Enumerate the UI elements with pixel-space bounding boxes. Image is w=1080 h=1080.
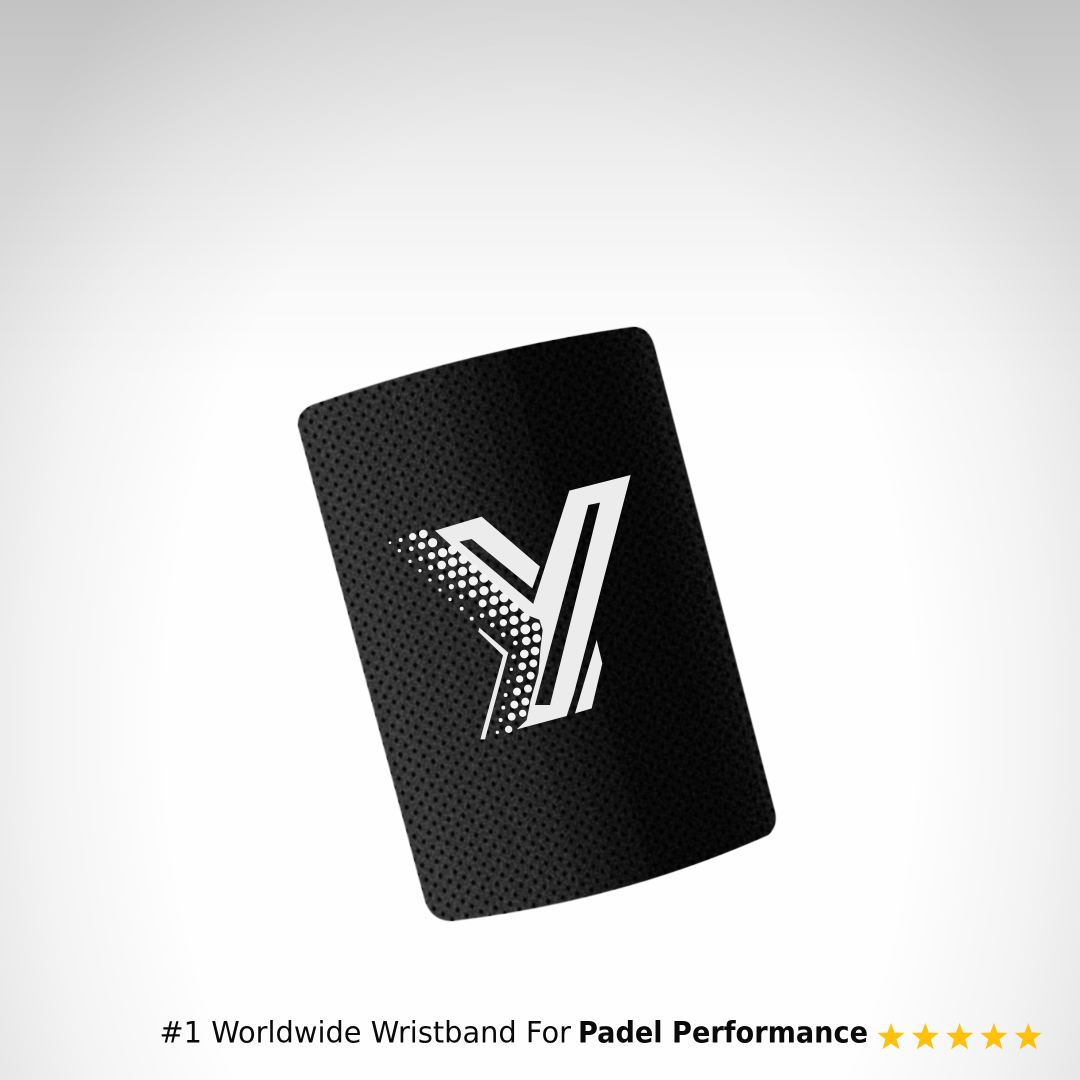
star 5 — [1015, 1023, 1042, 1049]
star 3 — [946, 1023, 973, 1049]
logo small right piece — [575, 640, 602, 713]
star 2 — [912, 1023, 939, 1049]
logo upper arm — [435, 517, 540, 620]
logo: Y mark — [389, 475, 631, 739]
five star rating — [878, 1023, 1042, 1049]
logo main stroke — [517, 475, 631, 729]
wristband product — [297, 326, 776, 922]
tagline — [160, 1016, 868, 1050]
tagline: #1 Worldwide Wristband For — [160, 1016, 571, 1050]
tagline: Padel Performance — [578, 1016, 868, 1050]
logo thin line — [478, 628, 508, 739]
logo halftone dots — [389, 530, 541, 734]
star 1 — [878, 1023, 904, 1049]
star 4 — [980, 1023, 1007, 1049]
